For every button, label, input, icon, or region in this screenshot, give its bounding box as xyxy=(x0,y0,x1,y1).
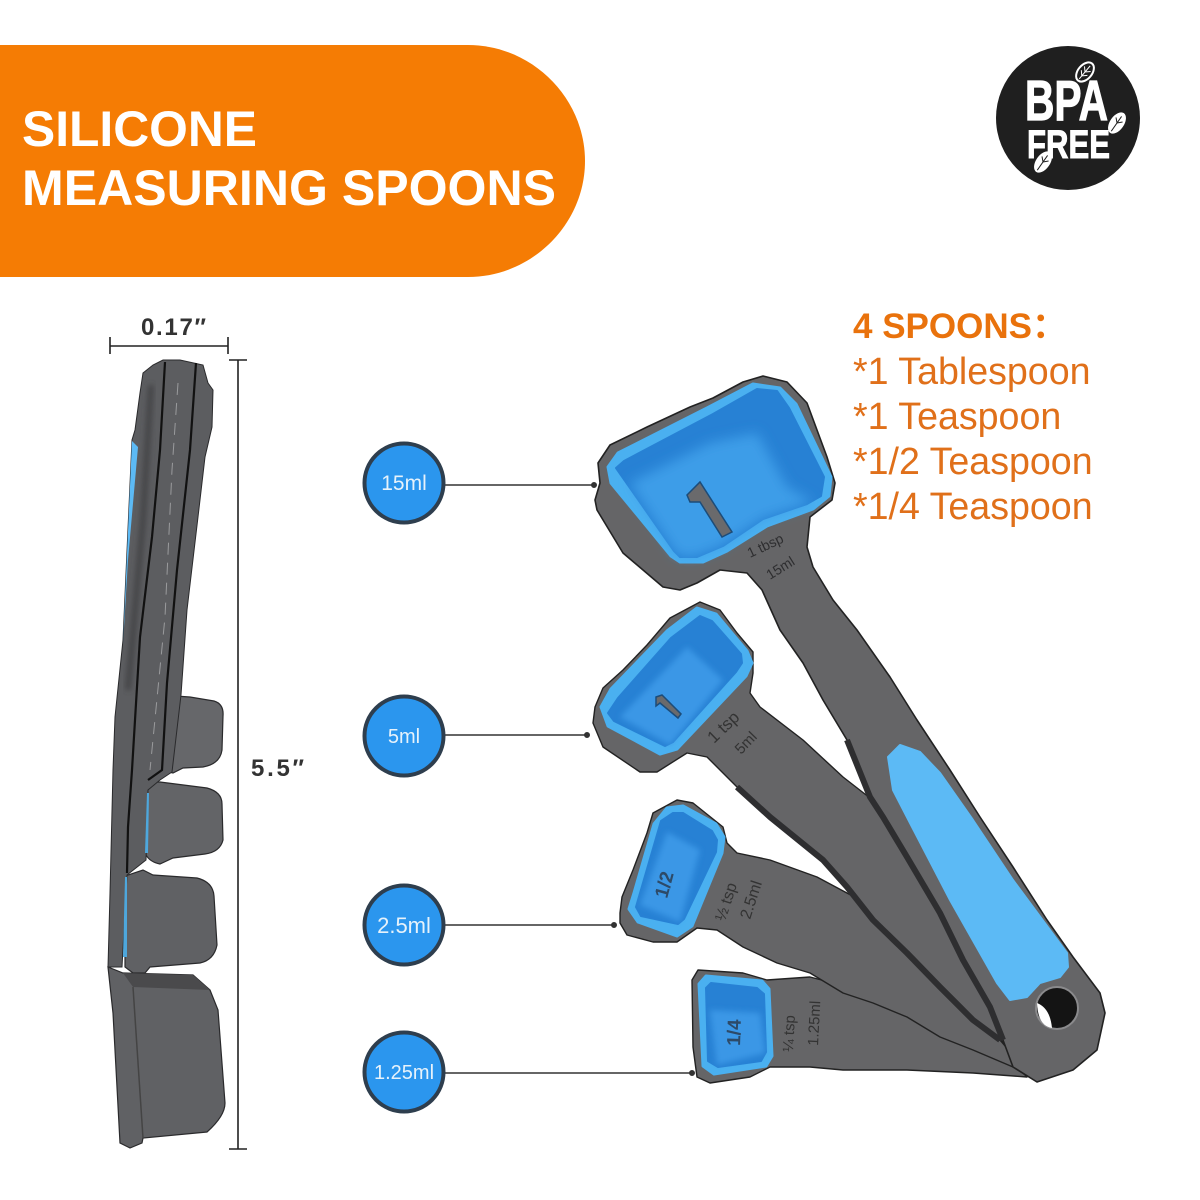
spoon: 1 tablespoon: 15ml xyxy=(763,553,797,583)
cup 5ml xyxy=(125,870,217,973)
callout: 2.5ml: 2.5ml xyxy=(377,913,431,938)
spoon list: *1 Teaspoon xyxy=(853,395,1061,437)
icon: BPA free badge xyxy=(996,46,1140,190)
spoon: 1/2 teaspoon: ½ tsp xyxy=(713,881,741,923)
spoon: 1/4 teaspoon xyxy=(692,970,1027,1083)
numeral 1 xyxy=(656,695,681,718)
spoon: 1/4 teaspoon: 1.25ml xyxy=(805,1000,824,1046)
spoon list: *1/2 Teaspoon xyxy=(853,440,1093,482)
spoon: 1/4 teaspoon: ¼ tsp xyxy=(780,1015,799,1052)
blue strips xyxy=(123,441,138,645)
callout: 1.25ml xyxy=(364,1032,444,1112)
title banner: SILICONE xyxy=(22,101,257,157)
spoon list: 4 SPOONS： xyxy=(853,307,1067,346)
grip xyxy=(888,745,1068,1000)
spoon list: *1/4 Teaspoon xyxy=(853,485,1093,527)
icon: BPA free badge: BPA xyxy=(1025,69,1108,133)
callout: 1.25ml: 1.25ml xyxy=(374,1062,434,1084)
icon: BPA free badge: FREE xyxy=(1027,123,1110,167)
spoon list: *1 Tablespoon xyxy=(853,350,1091,392)
width dimension: 0.17″ xyxy=(141,314,206,341)
height dimension: 5.5″ xyxy=(251,755,304,782)
width dimension xyxy=(110,314,228,354)
spoon: 1 tablespoon: 1 tbsp xyxy=(745,530,786,561)
height dimension xyxy=(229,360,304,1149)
numeral 1 xyxy=(687,482,732,537)
spoon: 1 teaspoon: 5ml xyxy=(732,729,761,758)
hanging hole xyxy=(1036,987,1078,1029)
spoon: 1 teaspoon xyxy=(593,602,1030,1060)
spoon: 1 tablespoon xyxy=(595,376,1105,1082)
callout: 15ml xyxy=(364,444,444,522)
spoon list xyxy=(853,307,1093,527)
spoon: 1/2 teaspoon xyxy=(620,800,1030,1075)
title banner: MEASURING SPOONS xyxy=(22,160,556,216)
cup 2.5ml xyxy=(146,782,223,864)
title banner xyxy=(0,45,585,277)
spoon: 1/2 teaspoon: 2.5ml xyxy=(738,879,766,921)
spoon: 1/2 teaspoon: 1/2 xyxy=(652,869,679,900)
callout: 15ml: 15ml xyxy=(381,472,427,495)
cup 15ml xyxy=(108,967,225,1148)
side view of stacked spoons xyxy=(108,360,225,1148)
spoon: 1/4 teaspoon: 1/4 xyxy=(724,1019,746,1046)
small cup 1.25ml xyxy=(160,695,223,773)
handle stack xyxy=(108,360,213,967)
callout: 5ml: 5ml xyxy=(388,726,420,748)
spoon: 1 teaspoon: 1 tsp xyxy=(704,708,743,747)
callout: 5ml xyxy=(364,696,444,776)
callout: 2.5ml xyxy=(364,886,444,964)
callout lines xyxy=(445,482,694,1076)
